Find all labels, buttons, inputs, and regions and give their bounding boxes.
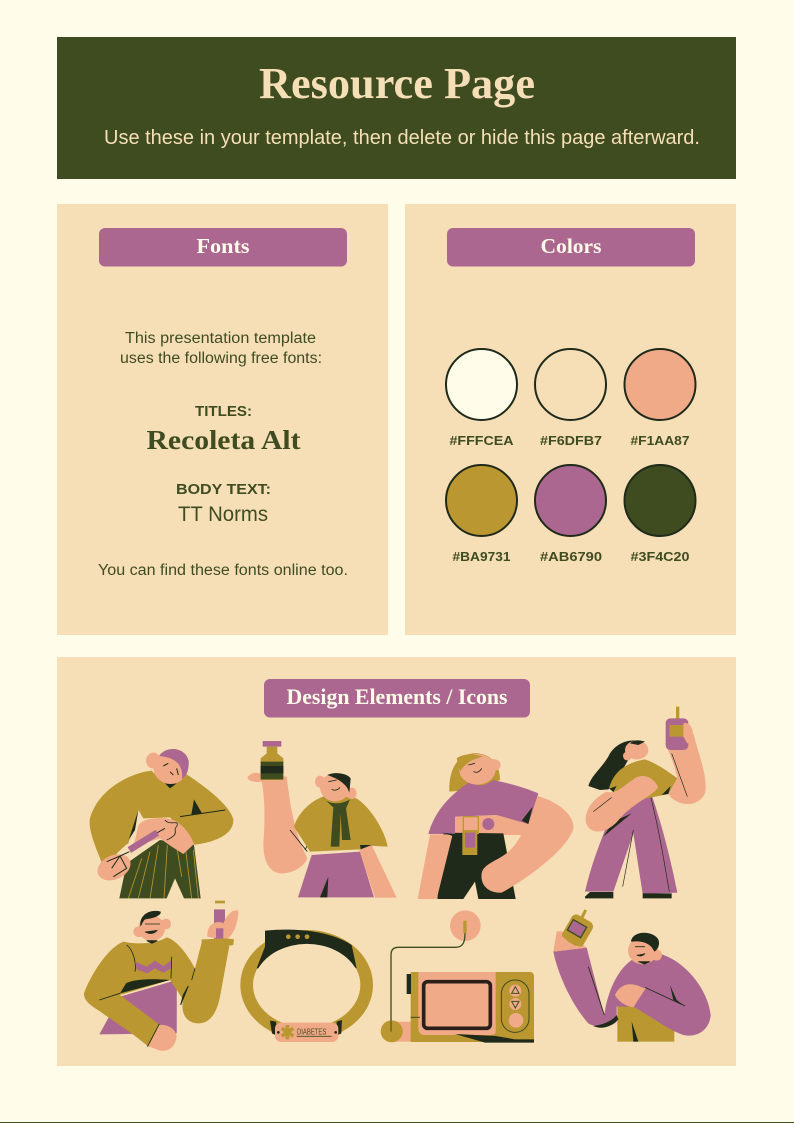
icon: insulin pump — [381, 910, 534, 1043]
text block: body font: TT Norms — [178, 503, 268, 526]
swatch: F6DFB7 — [535, 349, 606, 448]
swatch: 3F4C20 — [624, 465, 696, 564]
heading: colors: Colors — [540, 234, 602, 258]
swatch: FFFCEA — [446, 349, 517, 448]
panel: header banner — [57, 37, 736, 179]
swatch: AB6790 — [535, 465, 606, 564]
text block: titles font — [146, 404, 300, 455]
text block: body font: BODY TEXT: — [176, 482, 271, 498]
swatch: AB6790: #AB6790 — [540, 549, 602, 564]
text block: font intro: uses the following free fonts: — [120, 350, 322, 367]
heading: design elements: Design Elements / Icons — [286, 684, 508, 709]
text block: titles font: Recoleta Alt — [146, 425, 300, 455]
illustration: woman holding glucose meter — [585, 707, 706, 898]
heading: fonts: Fonts — [196, 234, 250, 258]
swatch: BA9731 — [446, 465, 517, 564]
subtitle: Use these in your template, then delete or hide this page afterward. — [104, 127, 700, 149]
text block: titles font: TITLES: — [195, 404, 252, 420]
illustration: man holding test tube — [84, 901, 238, 1051]
swatch: F1AA87: #F1AA87 — [630, 433, 690, 448]
heading: design elements — [264, 679, 530, 718]
illustration: woman wearing insulin pump — [418, 753, 573, 899]
illustration: person holding insulin bottle — [247, 741, 397, 898]
swatch: FFFCEA: #FFFCEA — [450, 433, 514, 448]
illustration: man with glucose meter — [553, 910, 711, 1042]
icon: medical ID bracelet — [247, 930, 367, 1042]
title: Resource Page — [259, 59, 535, 108]
swatch: F1AA87 — [624, 349, 696, 448]
text block: font note: You can find these fonts online too. — [98, 562, 348, 579]
panel: fonts — [57, 204, 388, 635]
swatch: BA9731: #BA9731 — [452, 549, 510, 564]
illustration: man injecting insulin — [90, 749, 233, 898]
panel: design elements — [57, 657, 736, 1066]
heading: colors — [447, 228, 695, 266]
text block: font intro — [120, 330, 322, 367]
swatch: 3F4C20: #3F4C20 — [630, 549, 690, 564]
text block: font intro: This presentation template — [125, 330, 316, 347]
text block: body font — [176, 482, 271, 526]
swatch: F6DFB7: #F6DFB7 — [540, 433, 602, 448]
icon: medical ID bracelet: DIABETES — [297, 1028, 326, 1037]
heading: fonts — [99, 228, 347, 266]
panel: colors — [405, 204, 736, 635]
